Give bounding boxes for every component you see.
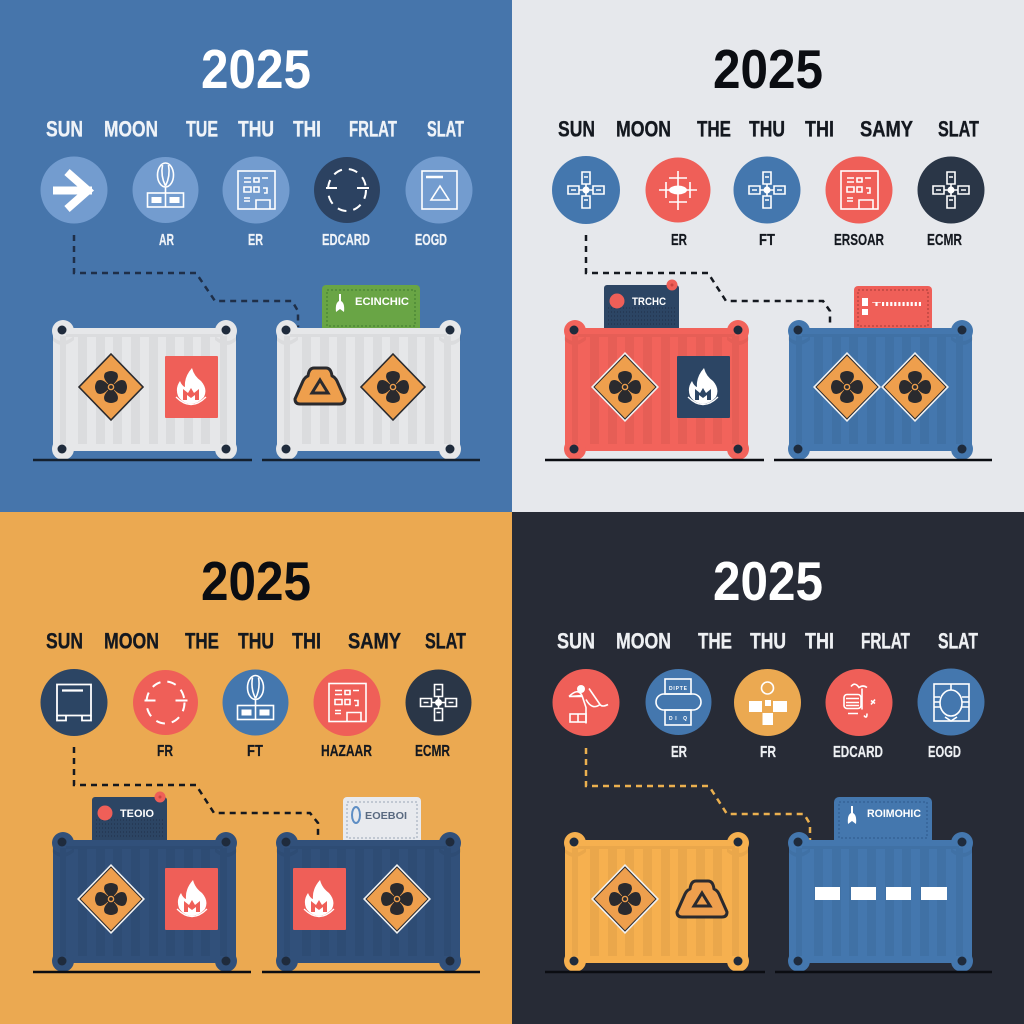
weekday labels: SUN: [46, 116, 83, 142]
weekday labels: THE: [697, 116, 731, 142]
tag: navy: TEOIO: [120, 808, 154, 820]
dashed route: [586, 235, 830, 325]
icon captions: ER: [671, 232, 687, 249]
weekday labels: THU: [238, 628, 274, 654]
icon captions: FR: [157, 743, 173, 760]
weekday labels: SLAT: [425, 628, 466, 654]
tag: navy: [92, 792, 167, 845]
icon captions: AR: [159, 232, 174, 249]
icon captions: FR: [760, 744, 776, 761]
container: left white: [52, 320, 237, 460]
weekday labels: [46, 628, 466, 654]
icon row: DI Q: [669, 716, 687, 722]
weekday labels: TUE: [186, 116, 218, 142]
weekday labels: THI: [292, 628, 321, 654]
title: 2025: 2025: [201, 38, 311, 100]
icon captions: [159, 232, 447, 249]
weekday labels: [46, 116, 464, 142]
icon captions: FT: [759, 232, 775, 249]
panel: light quadrant: [512, 0, 1024, 512]
weekday labels: SLAT: [427, 116, 464, 142]
icon captions: ER: [671, 744, 687, 761]
weekday labels: MOON: [616, 628, 671, 654]
icon captions: HAZAAR: [321, 743, 372, 760]
tag: navy: [604, 280, 679, 333]
panel: orange quadrant: [0, 512, 512, 1024]
tag: green: [322, 285, 420, 333]
tag: red: [854, 286, 932, 332]
container: right blue: [788, 320, 973, 460]
weekday labels: THE: [185, 628, 219, 654]
panel: dark quadrant: [512, 512, 1024, 1024]
weekday labels: SUN: [558, 116, 595, 142]
title: 2025: 2025: [201, 550, 311, 612]
weekday labels: THI: [293, 116, 321, 142]
weekday labels: MOON: [104, 116, 158, 142]
weekday labels: SAMY: [348, 628, 401, 654]
weekday labels: [558, 116, 979, 142]
tag: green: ECINCHIC: [355, 296, 409, 308]
weekday labels: THI: [805, 116, 834, 142]
container: left navy: [52, 832, 237, 972]
title: 2025: 2025: [713, 550, 823, 612]
icon captions: EDCARD: [322, 232, 370, 249]
weekday labels: THU: [238, 116, 274, 142]
icon captions: ECMR: [927, 232, 962, 249]
icon captions: EOGD: [415, 232, 447, 249]
container: right navy: [276, 832, 461, 972]
icon captions: EOGD: [928, 744, 961, 761]
weekday labels: MOON: [616, 116, 671, 142]
icon captions: [671, 232, 962, 249]
tag: white: EOEBOI: [365, 811, 407, 822]
weekday labels: THE: [698, 628, 732, 654]
weekday labels: THU: [750, 628, 786, 654]
container: right blue: [788, 832, 973, 972]
tag: red: TIIIIIIIIII: [872, 302, 924, 308]
ground lines: [33, 971, 480, 973]
tag: blue: ROIMOHIC: [867, 808, 921, 820]
tag: navy: TRCHC: [632, 296, 666, 308]
icon row: DIPTE: [669, 686, 688, 692]
tag: blue: [834, 797, 932, 845]
tag: white: [343, 797, 421, 845]
icon captions: EDCARD: [833, 744, 883, 761]
container: right white: [276, 320, 461, 460]
container: left red: [564, 320, 749, 460]
dashed route: [74, 747, 318, 837]
dashed route: [586, 748, 810, 840]
weekday labels: SLAT: [938, 628, 978, 654]
icon row: [40, 669, 472, 736]
icon row: [552, 156, 984, 224]
icon captions: ECMR: [415, 743, 450, 760]
weekday labels: SUN: [557, 628, 595, 654]
weekday labels: FRLAT: [861, 628, 910, 654]
weekday labels: SUN: [46, 628, 83, 654]
weekday labels: [557, 628, 978, 654]
container: left yellow: [564, 832, 749, 972]
weekday labels: MOON: [104, 628, 159, 654]
weekday labels: SLAT: [938, 116, 979, 142]
icon row: [552, 668, 984, 736]
panel: blue quadrant: [0, 0, 512, 512]
ground lines: [33, 459, 480, 461]
icon captions: ER: [248, 232, 263, 249]
icon captions: ERSOAR: [834, 232, 884, 249]
weekday labels: SAMY: [860, 116, 913, 142]
weekday labels: THI: [805, 628, 834, 654]
ground lines: [545, 459, 992, 461]
icon row: [40, 156, 472, 224]
dashed route: [74, 235, 298, 327]
ground lines: [545, 971, 992, 973]
icon captions: [157, 743, 450, 760]
weekday labels: FRLAT: [349, 116, 397, 142]
title: 2025: 2025: [713, 38, 823, 100]
icon captions: [671, 744, 961, 761]
icon captions: FT: [247, 743, 263, 760]
weekday labels: THU: [749, 116, 785, 142]
